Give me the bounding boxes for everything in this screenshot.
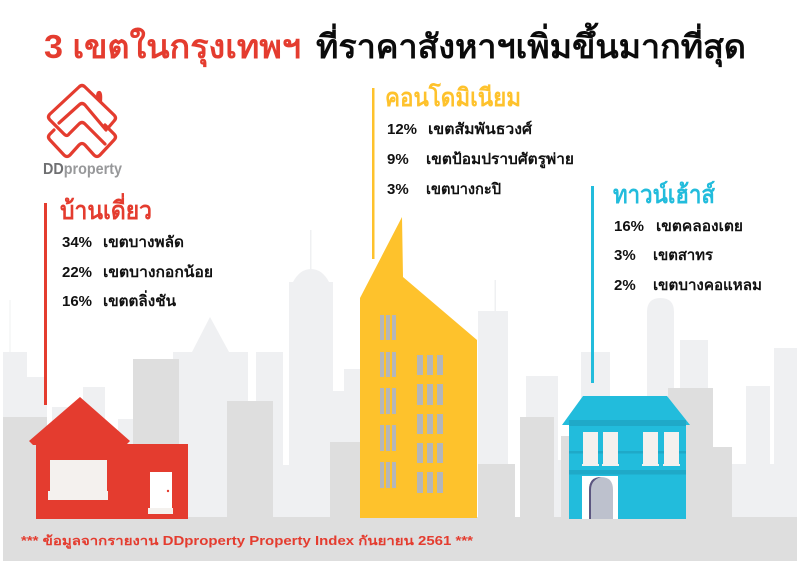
item: Taling Chan: 16%	[62, 293, 92, 310]
title: ที่ราคาสังหาฯเพิ่มขึ้นมากที่สุด	[316, 22, 746, 68]
title	[44, 22, 746, 68]
pointer line: townhouse	[591, 186, 594, 383]
item: Bang Phlat: เขตบางพลัด	[103, 234, 184, 251]
item: Khlong Toei: เขตคลองเตย	[656, 218, 743, 235]
item: Bang Kapi: เขตบางกะปิ	[426, 180, 501, 198]
item: Samphanthawong: 12%	[387, 121, 417, 138]
pointer line: condominium	[372, 88, 374, 259]
item: Pom Prap: เขตป้อมปราบศัตรูพ่าย	[426, 151, 574, 169]
item: Pom Prap: 9%	[387, 151, 409, 168]
item: Bangkok Noi: 22%	[62, 264, 92, 281]
icon: yellow condominium tower	[360, 217, 477, 518]
item: Sathon: 3%	[614, 247, 636, 264]
item: Bang Kho Laem: 2%	[614, 277, 636, 294]
panel: single house list	[44, 193, 213, 405]
background: city skyline	[3, 230, 797, 561]
item: Samphanthawong: เขตสัมพันธวงศ์	[428, 120, 532, 138]
logo: DDproperty: DDproperty	[43, 161, 122, 178]
icon: red house	[29, 397, 188, 519]
item: Sathon: เขตสาทร	[653, 247, 714, 264]
panel: condominium list	[372, 82, 574, 259]
panel: townhouse list	[591, 180, 762, 383]
item: Bang Kho Laem: เขตบางคอแหลม	[653, 277, 762, 294]
item: Khlong Toei: 16%	[614, 218, 644, 235]
item: Bang Kapi: 3%	[387, 181, 409, 198]
footnote: source: *** ข้อมูลจากรายงาน DDproperty Property Index กันยายน 2561 ***	[21, 534, 473, 549]
heading: single house: บ้านเดี่ยว	[60, 193, 152, 225]
item: Taling Chan: เขตตลิ่งชัน	[103, 290, 177, 310]
logo: DDproperty	[43, 86, 122, 178]
item: Bang Phlat: 34%	[62, 234, 92, 251]
pointer line: single house	[44, 203, 47, 405]
heading: townhouse: ทาวน์เฮ้าส์	[613, 180, 716, 209]
heading: condominium: คอนโดมิเนียม	[385, 82, 521, 112]
title: 3 เขตในกรุงเทพฯ	[44, 27, 301, 68]
icon: blue townhouse	[562, 396, 690, 519]
item: Bangkok Noi: เขตบางกอกน้อย	[103, 264, 213, 281]
